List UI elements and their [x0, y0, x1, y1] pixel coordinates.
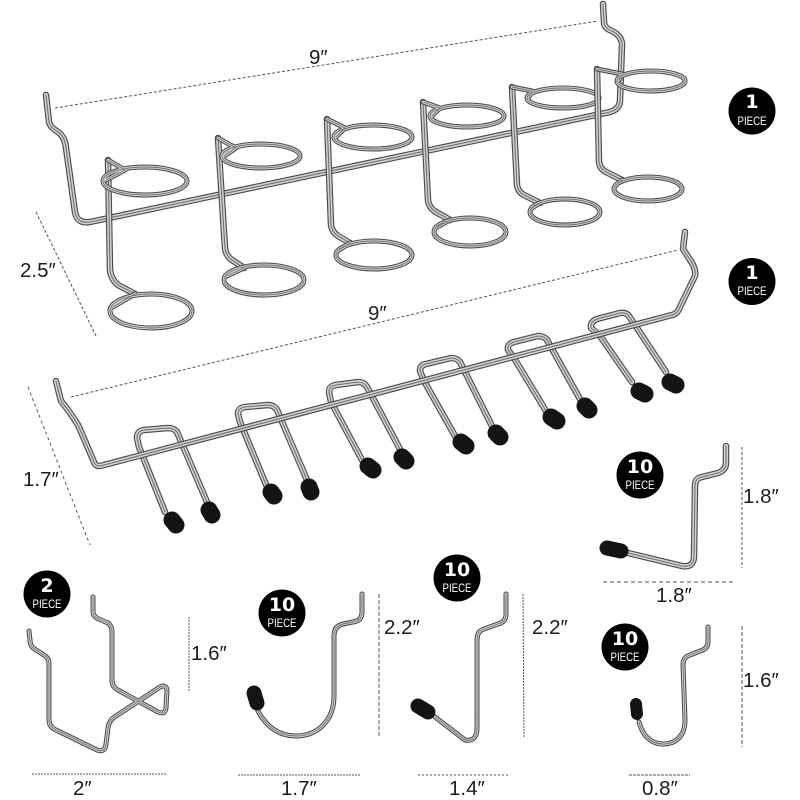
dimension line: small J hook height: [741, 626, 743, 747]
label: second rack width: 9″: [368, 302, 387, 325]
product: 1.6 inch small J hook: [636, 627, 708, 744]
prong pair 5: [508, 336, 589, 421]
ring holder 4: [423, 102, 506, 246]
dimension line: J hook width: [238, 774, 361, 776]
label: top rack depth: 2.5″: [20, 259, 56, 282]
badge: 2 piece double hook: 2: [40, 575, 54, 597]
badge: 10 piece angled hook: [616, 452, 664, 498]
ring holder 1: [103, 160, 192, 328]
label: 2 inch width: 2″: [73, 777, 92, 800]
label: 1.8 inch height: 1.8″: [743, 485, 779, 508]
prong pair 2: [238, 405, 311, 496]
dimension line: second rack 1.7 inch depth: [28, 387, 90, 545]
badge: 10 piece angled hook: PIECE: [626, 480, 655, 492]
badge: 1 piece second rack: [728, 258, 776, 305]
label: J hook width: 1.7″: [281, 777, 317, 800]
prong pair 6: [591, 313, 676, 394]
dimension line: 1.8 inch width: [603, 581, 735, 583]
rack front bar: [56, 232, 695, 466]
badge: 2 piece double hook: [24, 570, 70, 618]
label: top rack width: 9″: [309, 46, 328, 69]
badge: 1 piece top rack: PIECE: [738, 116, 767, 128]
dimension line: J hook height: [378, 594, 380, 738]
badge: 10 piece small J hook: 10: [612, 628, 638, 650]
badge: 1 piece top rack: 1: [745, 91, 759, 113]
dimension line: small J hook width: [629, 774, 690, 776]
badge: 10 piece long angled hook: PIECE: [442, 583, 472, 595]
badge: 10 piece small J hook: PIECE: [610, 652, 640, 664]
dimension line: top rack 2.5 inch depth: [36, 212, 96, 336]
rack back bar: [46, 4, 622, 222]
product: 2.2 inch J hook: [254, 594, 362, 736]
badge: 1 piece second rack: PIECE: [738, 286, 767, 298]
badge: 10 piece J hook: [258, 590, 306, 636]
ring holder 3: [327, 119, 412, 269]
badge: 10 piece long angled hook: [434, 554, 480, 602]
label: 1.6 inch height: 1.6″: [191, 642, 227, 665]
product: double prong hook: [29, 597, 167, 751]
badge: 1 piece top rack: [728, 88, 776, 134]
dimension line: angled hook height: [523, 594, 524, 738]
ring holder 2: [218, 138, 304, 295]
prong pair 3: [329, 382, 406, 470]
badge: 10 piece long angled hook: 10: [444, 559, 470, 581]
label: second rack depth: 1.7″: [23, 468, 59, 491]
badge: 10 piece J hook: PIECE: [268, 618, 297, 630]
dimension line: 2 inch width: [32, 773, 167, 775]
dimension line: second rack 9 inch width: [71, 250, 678, 397]
badge: 1 piece second rack: 1: [745, 262, 759, 284]
label: J hook height: 2.2″: [384, 616, 420, 639]
label: 1.8 inch width: 1.8″: [656, 584, 692, 607]
dimension line: 1.8 inch height: [741, 447, 743, 568]
label: angled hook width: 1.4″: [449, 777, 485, 800]
prong pair 4: [420, 358, 500, 446]
product: 2.2 inch angled hook: [418, 594, 506, 740]
label: small J hook width: 0.8″: [642, 777, 678, 800]
product: 1.8 inch angled hook: [607, 446, 726, 566]
label: angled hook height: 2.2″: [532, 616, 568, 639]
prong pair 1: [137, 428, 212, 525]
dimension line: angled hook width: [418, 774, 508, 776]
badge: 10 piece J hook: 10: [269, 594, 295, 616]
product: twelve-prong hanger rack: [56, 232, 695, 525]
ring holder 5: [512, 87, 600, 225]
badge: 10 piece small J hook: [602, 624, 648, 670]
dimension line: 1.6 inch height: [188, 617, 190, 692]
dimension line: top rack 9 inch width: [55, 21, 598, 108]
product: six-ring holder rack: [46, 4, 685, 328]
badge: 2 piece double hook: PIECE: [32, 599, 62, 611]
ring holder 6: [597, 69, 685, 201]
badge: 10 piece angled hook: 10: [627, 456, 653, 478]
label: small J hook height: 1.6″: [743, 669, 779, 692]
